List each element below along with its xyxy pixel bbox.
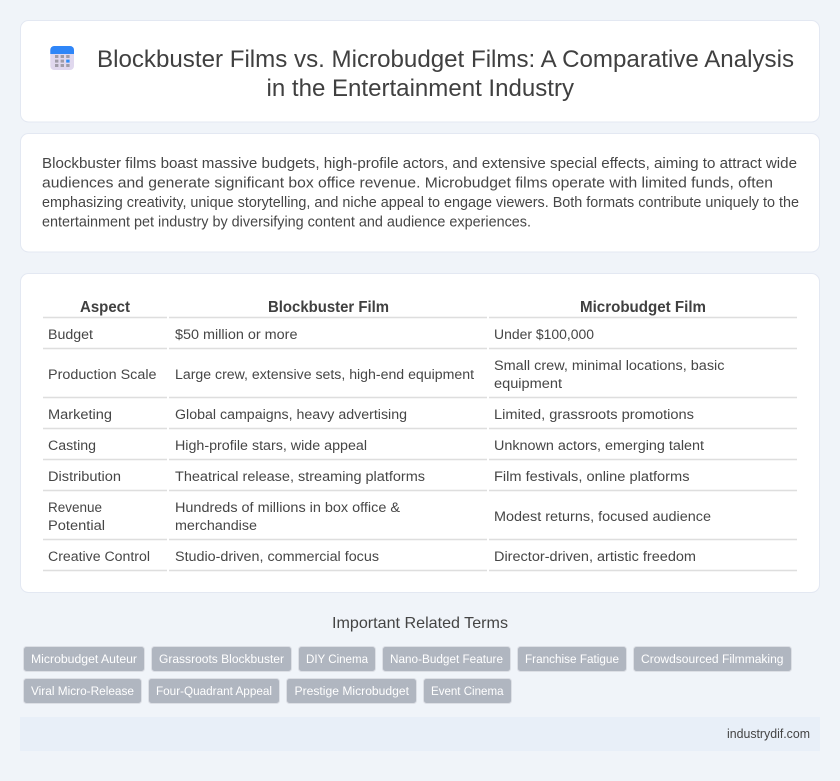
tag: Nano-Budget Feature: Nano-Budget Feature <box>390 652 503 666</box>
panel: comparison table <box>20 274 820 592</box>
table row: distribution: Distribution <box>48 469 121 485</box>
tag: Viral Micro-Release <box>24 678 142 704</box>
title: Blockbuster Films vs. Microbudget Films: A Comparative Analysis <box>97 46 794 73</box>
tag: Crowdsourced Filmmaking: Crowdsourced Filmmaking <box>641 652 784 666</box>
table row: casting <box>48 438 704 454</box>
tag: Franchise Fatigue <box>518 646 626 672</box>
table row: marketing: Marketing <box>48 407 112 423</box>
tag: DIY Cinema: DIY Cinema <box>306 652 368 666</box>
table row: revenue potential: Modest returns, focused audience <box>494 509 711 525</box>
table row: creative control <box>48 549 696 565</box>
tag: Microbudget Auteur: Microbudget Auteur <box>31 652 137 666</box>
text block: introduction paragraph: Blockbuster films boast massive budgets, high-profile actors, and extensive special effects, aiming to attract wide <box>42 156 797 172</box>
tag: Viral Micro-Release: Viral Micro-Release <box>31 684 134 698</box>
table row: revenue potential: Potential <box>48 518 105 534</box>
tag: Crowdsourced Filmmaking <box>634 646 792 672</box>
table row: casting: Unknown actors, emerging talent <box>494 438 704 454</box>
table row: distribution <box>48 469 690 485</box>
table row: casting: Casting <box>48 438 96 454</box>
related term tags <box>24 646 792 704</box>
tag: Franchise Fatigue: Franchise Fatigue <box>525 652 619 666</box>
tag: DIY Cinema <box>298 646 376 672</box>
panel: introduction <box>20 134 820 252</box>
icon: calendar <box>50 46 74 70</box>
table row: production scale <box>48 358 724 392</box>
text block: introduction paragraph: entertainment pet industry by diversifying content and audience experiences. <box>42 214 531 230</box>
table row: budget: Budget <box>48 327 93 343</box>
tag: Event Cinema: Event Cinema <box>431 684 504 698</box>
table row: marketing <box>48 407 694 423</box>
table row: marketing: Global campaigns, heavy advertising <box>175 407 407 423</box>
table row: production scale: Large crew, extensive sets, high-end equipment <box>175 367 474 383</box>
table header row: Aspect <box>80 299 130 316</box>
table row: creative control: Studio-driven, commercial focus <box>175 549 379 565</box>
table row: revenue potential: Revenue <box>48 500 102 516</box>
tag: Four-Quadrant Appeal <box>148 678 280 704</box>
tag: Event Cinema <box>424 678 512 704</box>
table row: distribution: Theatrical release, streaming platforms <box>175 469 425 485</box>
table row: marketing: Limited, grassroots promotions <box>494 407 694 423</box>
heading: important related terms: Important Related Terms <box>332 615 508 632</box>
table row: revenue potential: Hundreds of millions in box office & <box>175 500 401 516</box>
tag: Nano-Budget Feature <box>382 646 510 672</box>
title <box>97 46 794 102</box>
table row: revenue potential <box>48 500 711 534</box>
tag: Grassroots Blockbuster: Grassroots Blockbuster <box>159 652 284 666</box>
table header row: Microbudget Film <box>580 299 706 316</box>
table header row <box>80 299 706 316</box>
tag: Microbudget Auteur <box>24 646 144 672</box>
table row: production scale: Production Scale <box>48 367 157 383</box>
tag: Four-Quadrant Appeal: Four-Quadrant Appeal <box>156 684 272 698</box>
tag: Prestige Microbudget <box>286 678 416 704</box>
table row: budget: Under $100,000 <box>494 327 594 343</box>
table row: budget: $50 million or more <box>175 327 298 343</box>
table row: casting: High-profile stars, wide appeal <box>175 438 367 454</box>
tag: Prestige Microbudget: Prestige Microbudget <box>294 684 410 698</box>
panel: title header <box>20 20 820 122</box>
table row: budget <box>48 327 594 343</box>
table row: distribution: Film festivals, online platforms <box>494 469 690 485</box>
table row: creative control: Creative Control <box>48 549 150 565</box>
table row: revenue potential: merchandise <box>175 518 257 534</box>
footer: industrydif.com <box>727 726 810 741</box>
table row: production scale: Small crew, minimal locations, basic <box>494 358 724 374</box>
table header row: Blockbuster Film <box>268 299 389 316</box>
title: in the Entertainment Industry <box>266 75 574 102</box>
table row: production scale: equipment <box>494 376 562 392</box>
tag: Grassroots Blockbuster <box>152 646 292 672</box>
text block: introduction paragraph: emphasizing creativity, unique storytelling, and niche appeal to engage viewers. Both formats contribute uniquely to the <box>42 195 799 211</box>
text block: introduction paragraph: audiences and generate significant box office revenue. Microbudget films operate with limited funds, often <box>42 176 773 192</box>
table row: creative control: Director-driven, artistic freedom <box>494 549 696 565</box>
text block: introduction paragraph <box>42 156 799 230</box>
footer <box>20 717 820 751</box>
